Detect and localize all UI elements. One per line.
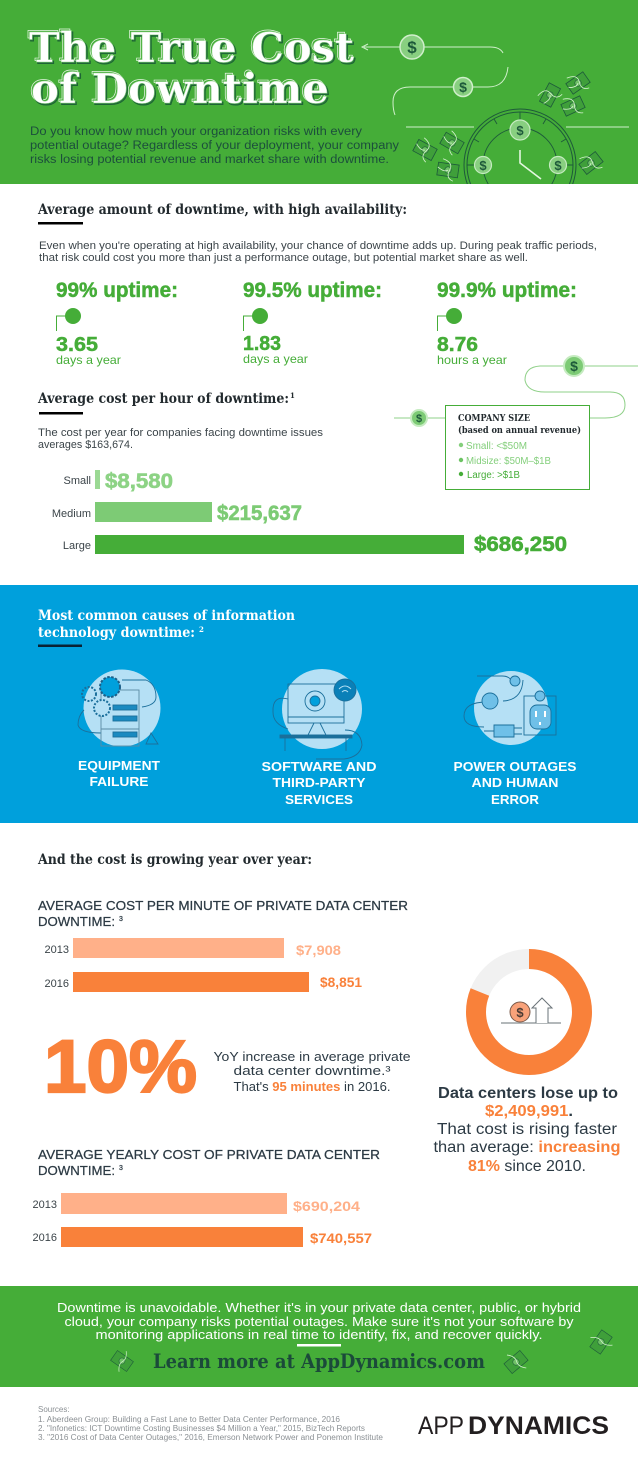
link text: Learn more at AppDynamics.com [153, 1349, 485, 1373]
legend: company size: Large: >$1B [467, 470, 520, 481]
title: of Downtime [32, 66, 330, 114]
bar chart: cost per hour [52, 470, 567, 556]
text: YoY increase: YoY increase in average private [214, 1050, 411, 1064]
bar chart: cost per minute: $7,908 [296, 942, 341, 958]
logo: APP [418, 1412, 464, 1440]
description: averages $163,674. [38, 439, 133, 451]
label: software [262, 759, 376, 807]
legend: company size: COMPANY SIZE [458, 413, 530, 424]
intro text: Do you know how much your organization risks with every [30, 126, 362, 138]
stat: 99.5% uptime: days a year [243, 352, 308, 366]
title: The True Cost [29, 24, 354, 72]
stat: 99.5% uptime: 1.83 [243, 333, 281, 355]
sources: Sources: [38, 1405, 70, 1414]
illustration: flying bills [411, 69, 606, 182]
bar chart: cost per minute [45, 938, 362, 992]
sources: 2. "Infonetics: ICT Downtime Costing Businesses $4 Million a Year," 2015, BizTech Reports [38, 1424, 365, 1433]
stat: 99.9% uptime: 99.9% uptime: [437, 279, 577, 302]
bar chart: cost per minute: 2013 [45, 944, 69, 956]
bar chart: cost per hour: $686,250 [474, 533, 567, 556]
panel: header [0, 0, 638, 184]
bar chart: cost per minute: $8,851 [320, 974, 362, 990]
icon: coin: $ [459, 79, 467, 95]
illustration: clock with coins [464, 108, 576, 184]
stat: 99% uptime: days a year [56, 353, 121, 367]
callout: data centers: That cost is rising faster [437, 1121, 617, 1138]
intro text: potential outage? Regardless of your deployment, your company [30, 140, 399, 152]
chart heading: per minute: 3 [119, 916, 123, 923]
heading [38, 608, 295, 647]
title: The True Cost [28, 22, 353, 70]
legend: company size [446, 406, 590, 490]
heading: 1 [290, 391, 295, 400]
stat: 99% uptime: 3.65 [56, 334, 98, 356]
description: The cost per year for companies facing downtime issues [38, 427, 324, 439]
illustration: clock with coins: $ [554, 158, 562, 173]
chart heading: yearly: 3 [119, 1165, 123, 1172]
closing text [57, 1300, 581, 1342]
description: Even when you're operating at high availability, your chance of downtime adds up. During peak traffic periods, [39, 240, 597, 252]
bar chart: cost per hour: $215,637 [217, 502, 302, 525]
panel: causes [0, 585, 638, 823]
title: The True Cost [30, 25, 355, 73]
closing text: cloud, your company risks potential outages. Make sure it's not your software by [64, 1314, 574, 1329]
bar chart: yearly cost: 2013 [33, 1199, 57, 1211]
text: YoY increase: That's 95 minutes in 2016. [234, 1080, 390, 1094]
connector path with coins: $ [416, 413, 422, 425]
icon: coin [400, 35, 424, 59]
stat: 99.9% uptime: hours a year [437, 353, 507, 367]
label: equipment failure: EQUIPMENT [78, 758, 160, 773]
bar chart: yearly cost: $690,204 [293, 1198, 360, 1214]
bar chart: yearly cost: 2016 [33, 1232, 57, 1244]
heading: Most common causes of information [38, 608, 295, 624]
callout: data centers: 81% since 2010. [468, 1158, 586, 1175]
icon: software and services [273, 669, 362, 759]
bar chart: cost per hour: Medium [52, 508, 91, 520]
closing text: Downtime is unavoidable. Whether it's in your private data center, public, or hybrid [57, 1300, 581, 1315]
bar chart: cost per hour: Small [63, 475, 91, 487]
description: that risk could cost you more than just a performance outage, but potential market share as well. [39, 252, 528, 264]
chart heading: per minute: AVERAGE COST PER MINUTE OF PRIVATE DATA CENTER [38, 898, 408, 913]
heading: And the cost is growing year over year: [37, 852, 312, 868]
chart heading: yearly: DOWNTIME: [38, 1163, 115, 1178]
legend: company size: Small: <$50M [466, 441, 527, 452]
chart heading: yearly [38, 1147, 380, 1178]
bar chart: yearly cost: $740,557 [310, 1230, 372, 1246]
text: YoY increase [214, 1050, 411, 1094]
chart heading: per minute: DOWNTIME: [38, 914, 115, 929]
sources: 1. Aberdeen Group: Building a Fast Lane to Better Data Center Performance, 2016 [38, 1415, 341, 1424]
bar chart: cost per hour: Large [63, 540, 91, 552]
label: software: SOFTWARE AND [262, 759, 376, 774]
stat: 99.5% uptime [243, 279, 382, 366]
connector path with coins: $ [570, 358, 578, 374]
bar chart: cost per hour: $8,580 [105, 470, 173, 493]
chart heading: per minute [38, 898, 408, 929]
description [39, 240, 597, 264]
logo: DYNAMICS [468, 1412, 609, 1440]
panel: average downtime [37, 202, 597, 367]
panel: call to action [0, 1286, 638, 1387]
donut chart [476, 959, 582, 1065]
icon: coin: $ [407, 38, 417, 57]
heading: Average cost per hour of downtime: [37, 391, 289, 407]
legend: company size: (based on annual revenue) [458, 425, 581, 436]
callout: data centers [434, 1085, 620, 1175]
heading [37, 391, 295, 414]
logo [418, 1412, 609, 1440]
intro text: risks losing potential revenue and market share with downtime. [30, 154, 389, 166]
callout: data centers: than average: increasing [434, 1139, 620, 1156]
bar chart: yearly cost [33, 1193, 372, 1247]
big stat: 10%: 10% [44, 1025, 197, 1108]
label: software: THIRD-PARTY [272, 775, 366, 790]
illustration: clock with coins: $ [516, 123, 524, 138]
description [38, 427, 324, 451]
heading: Average amount of downtime, with high availability: [37, 202, 407, 218]
sources: 3. "2016 Cost of Data Center Outages," 2016, Emerson Network Power and Ponemon Institute [38, 1433, 384, 1442]
label: equipment failure: FAILURE [90, 774, 149, 789]
legend: company size: Midsize: $50M–$1B [466, 456, 551, 467]
callout: data centers: Data centers lose up to [438, 1085, 618, 1102]
heading: 2 [199, 625, 204, 634]
bar chart: cost per minute: 2016 [45, 978, 69, 990]
title: of Downtime [30, 64, 328, 112]
stat: 99.9% uptime: 8.76 [437, 334, 478, 356]
title [28, 22, 355, 114]
icon: power outages [464, 671, 556, 745]
icons: bills [108, 1327, 616, 1377]
callout: data centers: $2,409,991 . [485, 1103, 573, 1120]
label: equipment failure [78, 758, 160, 789]
connector path with coins [394, 356, 638, 426]
label: power: POWER OUTAGES [454, 759, 577, 774]
stat: 99% uptime: 99% uptime: [56, 279, 178, 302]
icon: coin [454, 78, 472, 96]
icon: coin and arrow: $ [516, 1005, 524, 1020]
illustration: path with coins [362, 35, 629, 127]
heading: technology downtime: [38, 625, 195, 641]
closing text: monitoring applications in real time to identify, fix, and recover quickly. [96, 1327, 542, 1342]
panel: cost per hour [37, 356, 638, 556]
label: power: AND HUMAN [472, 775, 558, 790]
title: of Downtime [31, 65, 329, 113]
stat: 99% uptime [56, 279, 178, 367]
label: power: ERROR [491, 792, 540, 807]
stat: 99.9% uptime [437, 279, 577, 367]
text: YoY increase: data center downtime.³ [234, 1064, 390, 1078]
label: software: SERVICES [285, 792, 353, 807]
icon: equipment failure [78, 670, 160, 746]
sources [38, 1405, 384, 1442]
label: power [454, 759, 577, 807]
intro text [30, 126, 399, 166]
stat: 99.5% uptime: 99.5% uptime: [243, 279, 382, 302]
chart heading: yearly: AVERAGE YEARLY COST OF PRIVATE DATA CENTER [38, 1147, 380, 1162]
illustration: clock with coins: $ [479, 158, 487, 173]
panel: cost growth [33, 852, 620, 1247]
